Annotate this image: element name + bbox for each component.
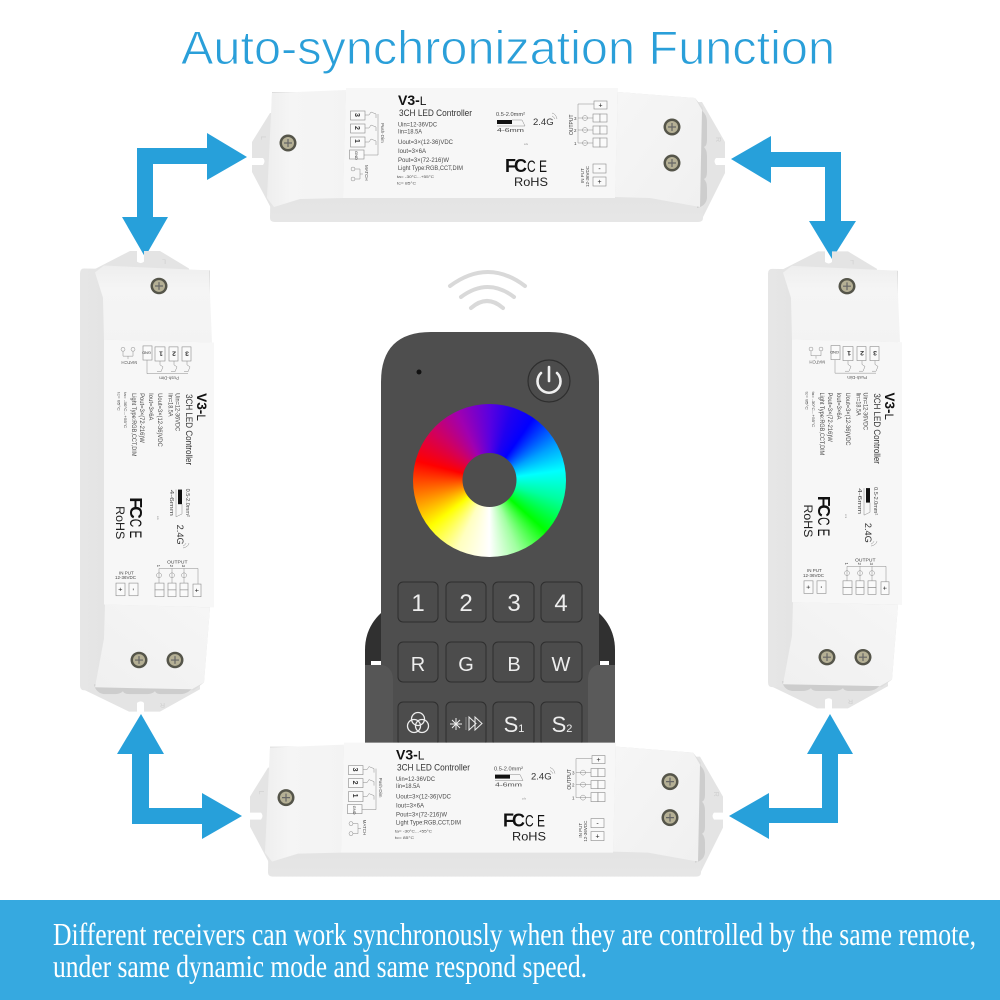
output and input terminals: 1 bbox=[156, 565, 161, 568]
terminal ridges bbox=[695, 763, 705, 863]
L and R embossed marks bbox=[848, 258, 854, 705]
push-dim wiring: 3 bbox=[185, 349, 189, 356]
certification marks: FC bbox=[505, 156, 527, 176]
screws bbox=[818, 278, 872, 665]
model and specifications: Uout=3×(12-36)VDC bbox=[844, 392, 850, 446]
model and specifications bbox=[805, 392, 897, 464]
L and R embossed marks: L bbox=[257, 791, 264, 795]
output and input terminals: + bbox=[595, 834, 600, 841]
model and specifications: Iout=3×6A bbox=[396, 804, 424, 810]
wire specification and 2.4G bbox=[156, 489, 190, 548]
output and input terminals: 2 bbox=[572, 783, 575, 788]
model and specifications: Iout=3×6A bbox=[398, 149, 426, 155]
L and R embossed marks: R bbox=[714, 137, 721, 142]
push-dim wiring: GND bbox=[142, 350, 151, 355]
model and specifications: tc= 85°C bbox=[395, 835, 414, 840]
push-dim wiring bbox=[809, 346, 879, 380]
wire specification and 2.4G: 0.5-2.0mm² bbox=[872, 487, 878, 515]
model and specifications: Iin=18.5A bbox=[396, 784, 420, 790]
wire specification and 2.4G: 2.4G bbox=[863, 523, 873, 543]
model and specifications bbox=[395, 747, 470, 840]
output and input terminals: IN PUT bbox=[807, 568, 822, 573]
output and input terminals: 2 bbox=[169, 565, 174, 568]
output and input terminals: OUTPUT bbox=[567, 769, 573, 790]
model and specifications: V3-L bbox=[396, 747, 425, 763]
terminal ridges bbox=[782, 681, 882, 691]
model and specifications: Pout=3×(72-216)W bbox=[826, 392, 832, 442]
model and specifications: Uout=3×(12-36)VDC bbox=[398, 140, 454, 146]
push-dim wiring: 3 bbox=[353, 113, 360, 117]
mounting flanges bbox=[773, 251, 888, 708]
title: Auto-synchronization Function bbox=[181, 21, 835, 74]
wire specification and 2.4G: 4-6mm bbox=[497, 128, 525, 134]
output and input terminals bbox=[567, 756, 605, 842]
end cap left bbox=[267, 90, 346, 207]
certification marks: C E bbox=[126, 519, 145, 538]
model and specifications: tc= 85°C bbox=[397, 180, 416, 185]
L and R embossed marks: R bbox=[160, 701, 165, 708]
receiver: left bbox=[80, 251, 214, 712]
model and specifications: V3-L bbox=[398, 92, 427, 108]
model and specifications: Uout=3×(12-36)VDC bbox=[396, 795, 452, 801]
push-dim wiring: 2 bbox=[860, 349, 864, 356]
button row 2: B bbox=[507, 654, 521, 676]
output and input terminals: + bbox=[804, 585, 811, 589]
footer description text: under same dynamic mode and same respond speed. bbox=[53, 948, 587, 984]
certification marks: RoHS bbox=[801, 505, 814, 538]
push-dim wiring: 1 bbox=[159, 349, 163, 356]
output and input terminals: + bbox=[596, 757, 601, 764]
certification marks bbox=[801, 496, 834, 538]
model and specifications: 3CH LED Controller bbox=[872, 393, 882, 464]
base bbox=[268, 747, 701, 877]
button row 1: 2 bbox=[459, 590, 473, 617]
base bbox=[270, 92, 703, 222]
output and input terminals: 1 bbox=[574, 141, 577, 146]
model and specifications: Pout=3×(72-216)W bbox=[138, 393, 144, 443]
arrow: top-left double-headed elbow bbox=[122, 133, 247, 257]
output and input terminals: IN PUT bbox=[119, 570, 134, 575]
output and input terminals bbox=[115, 560, 201, 597]
push-dim wiring: MATCH bbox=[364, 165, 369, 181]
push-dim wiring: 2 bbox=[353, 126, 360, 130]
certification marks bbox=[503, 811, 546, 844]
output and input terminals: + bbox=[598, 102, 603, 110]
remote body bbox=[381, 332, 599, 745]
model and specifications: ta= -30°C...+55°C bbox=[811, 392, 816, 427]
end cap left bbox=[783, 266, 900, 342]
L and R embossed marks bbox=[160, 258, 166, 708]
receiver: bottom bbox=[250, 743, 723, 877]
mounting flanges bbox=[252, 102, 725, 217]
model and specifications bbox=[397, 92, 472, 185]
output and input terminals bbox=[803, 558, 889, 594]
power button bbox=[528, 360, 570, 402]
colour wheel hub bbox=[462, 453, 516, 507]
certification marks: FC bbox=[814, 496, 834, 517]
model and specifications: Light Type:RGB,CCT,DIM bbox=[396, 821, 461, 827]
indicator dot bbox=[416, 370, 422, 374]
model and specifications: ta= -30°C...+55°C bbox=[395, 829, 432, 834]
wire specification and 2.4G: 0.5-2.0mm² bbox=[184, 489, 190, 517]
output and input terminals: 3 bbox=[869, 562, 874, 565]
button row 2: G bbox=[458, 654, 474, 676]
certification marks: FC bbox=[503, 811, 525, 831]
base bbox=[768, 269, 898, 687]
L and R embossed marks: L bbox=[162, 258, 166, 265]
push-dim wiring: Push-Dim bbox=[847, 375, 867, 380]
push-dim wiring: 3 bbox=[351, 768, 358, 772]
L and R embossed marks bbox=[257, 791, 719, 797]
certification marks: RoHS bbox=[514, 175, 548, 189]
wire specification and 2.4G: 4-6mm bbox=[856, 488, 862, 515]
push-dim wiring: 1 bbox=[847, 349, 851, 356]
push-dim wiring: MATCH bbox=[809, 360, 825, 365]
colour wheel bbox=[413, 404, 566, 557]
model and specifications: Iin=18.5A bbox=[166, 393, 173, 417]
certification marks: C E bbox=[527, 157, 547, 176]
push-dim wiring: 3 bbox=[873, 349, 877, 356]
output and input terminals: + bbox=[880, 586, 888, 590]
certification marks: C E bbox=[814, 517, 833, 536]
model and specifications: tc= 85°C bbox=[805, 392, 810, 410]
model and specifications: Iin=18.5A bbox=[398, 130, 422, 136]
arrow: bottom-left double-headed elbow bbox=[117, 714, 242, 839]
end cap right bbox=[783, 602, 898, 686]
footer band bbox=[0, 900, 1000, 1000]
output and input terminals: IN PUT bbox=[580, 168, 585, 183]
output and input terminals: OUTPUT bbox=[569, 114, 575, 135]
label plate bbox=[343, 88, 618, 198]
wire specification and 2.4G: o k bbox=[156, 516, 160, 520]
receiver: right bbox=[768, 251, 902, 708]
output and input terminals: - bbox=[596, 821, 599, 828]
button row 1 bbox=[398, 582, 582, 622]
output and input terminals: 2 bbox=[574, 128, 577, 133]
push-dim wiring: GND bbox=[830, 350, 839, 355]
model and specifications: 3CH LED Controller bbox=[397, 763, 470, 773]
button row 1: 1 bbox=[411, 590, 425, 617]
push-dim wiring: Push-Dim bbox=[378, 778, 383, 798]
screws bbox=[130, 278, 184, 668]
certification marks bbox=[113, 497, 146, 539]
L and R embossed marks: L bbox=[259, 136, 266, 140]
model and specifications: Pout=3×(72-216)W bbox=[396, 813, 447, 819]
model and specifications: tc= 85°C bbox=[117, 392, 122, 411]
icon: wireless signal bbox=[450, 272, 525, 308]
button row 2: R bbox=[411, 654, 425, 676]
L and R embossed marks: R bbox=[712, 792, 719, 797]
button row 3: S1 bbox=[504, 712, 524, 737]
button row 3 bbox=[398, 702, 582, 746]
L and R embossed marks: R bbox=[848, 698, 853, 705]
footer description text bbox=[53, 916, 976, 984]
output and input terminals: 12-36VDC bbox=[585, 165, 590, 187]
wire specification and 2.4G: 2.4G bbox=[531, 772, 552, 783]
arrow: bottom-right double-headed elbow bbox=[729, 714, 853, 839]
push-dim wiring: 1 bbox=[351, 794, 358, 798]
screws bbox=[278, 773, 678, 826]
certification marks: RoHS bbox=[512, 830, 546, 844]
model and specifications: Uin=12-36VDC bbox=[861, 392, 868, 431]
output and input terminals: IN PUT bbox=[578, 823, 583, 838]
wire specification and 2.4G: 4-6mm bbox=[495, 783, 523, 789]
output and input terminals: 12-36VDC bbox=[803, 573, 825, 578]
push-dim wiring: 2 bbox=[172, 349, 176, 356]
button row 2: W bbox=[552, 654, 571, 676]
label plate bbox=[341, 743, 616, 853]
output and input terminals: 12-36VDC bbox=[583, 820, 588, 842]
model and specifications bbox=[117, 392, 210, 465]
output and input terminals bbox=[569, 101, 607, 187]
certification marks: C E bbox=[525, 812, 545, 831]
remote holder wings behind bbox=[365, 613, 615, 745]
certification marks: FC bbox=[126, 497, 146, 519]
push-dim wiring: 1 bbox=[353, 139, 360, 143]
button row 2 bbox=[398, 642, 582, 682]
output and input terminals: OUTPUT bbox=[167, 560, 187, 566]
wire specification and 2.4G bbox=[844, 487, 878, 546]
model and specifications: Iout=3×6A bbox=[147, 393, 153, 420]
receiver: top bbox=[252, 88, 725, 222]
model and specifications: Pout=3×(72-216)W bbox=[398, 158, 449, 164]
push-dim wiring bbox=[121, 346, 191, 381]
push-dim wiring: MATCH bbox=[362, 820, 367, 835]
wire specification and 2.4G bbox=[496, 112, 557, 146]
model and specifications: V3- L bbox=[194, 393, 210, 421]
base bbox=[80, 268, 210, 690]
remote control bbox=[365, 332, 615, 746]
button row 1: 4 bbox=[554, 590, 568, 617]
model and specifications: Uout=3×(12-36)VDC bbox=[156, 393, 162, 447]
model and specifications: 3CH LED Controller bbox=[399, 108, 472, 118]
output and input terminals: 3 bbox=[181, 565, 186, 568]
output and input terminals: 3 bbox=[574, 116, 577, 121]
output and input terminals: + bbox=[192, 588, 200, 592]
certification marks: RoHS bbox=[113, 506, 127, 539]
push-dim wiring: Push-Dim bbox=[380, 123, 385, 143]
output and input terminals: OUTPUT bbox=[855, 558, 876, 563]
model and specifications: Light Type:RGB,CCT,DIM bbox=[130, 393, 136, 457]
push-dim wiring: GND bbox=[354, 151, 359, 160]
model and specifications: Light Type:RGB,CCT,DIM bbox=[398, 166, 463, 172]
button row 3: S2 bbox=[552, 712, 572, 737]
wire specification and 2.4G: 2.4G bbox=[175, 525, 185, 545]
output and input terminals: - bbox=[817, 586, 824, 588]
push-dim wiring bbox=[350, 111, 385, 181]
label plate bbox=[104, 340, 214, 607]
model and specifications: Uin=12-36VDC bbox=[173, 393, 180, 432]
wire specification and 2.4G: o k bbox=[844, 514, 848, 519]
model and specifications: Iin=18.5A bbox=[854, 392, 861, 416]
end cap right bbox=[95, 605, 210, 689]
wire specification and 2.4G: o k bbox=[522, 797, 527, 801]
end cap right bbox=[613, 747, 700, 862]
mounting flanges bbox=[250, 757, 723, 872]
label plate bbox=[792, 339, 902, 605]
end cap right bbox=[615, 92, 702, 207]
screws bbox=[280, 118, 680, 172]
output and input terminals: 12-36VDC bbox=[115, 575, 137, 580]
wire specification and 2.4G: o k bbox=[524, 142, 529, 146]
wire specification and 2.4G: 0.5-2.0mm² bbox=[494, 767, 523, 773]
push-dim wiring: 2 bbox=[351, 781, 358, 785]
arrow: top-right double-headed elbow bbox=[731, 136, 856, 259]
button row 1: 3 bbox=[507, 590, 521, 617]
terminal ridges bbox=[94, 684, 194, 694]
model and specifications: ta= -30°C...+55°C bbox=[397, 174, 434, 179]
model and specifications: Light Type:RGB,CCT,DIM bbox=[818, 392, 824, 455]
wire specification and 2.4G: 2.4G bbox=[533, 117, 554, 128]
push-dim wiring: MATCH bbox=[121, 360, 137, 365]
mounting flanges bbox=[85, 251, 200, 712]
wire specification and 2.4G: 4-6mm bbox=[168, 490, 174, 517]
output and input terminals: 3 bbox=[572, 771, 575, 776]
wire specification and 2.4G bbox=[494, 767, 555, 801]
output and input terminals: 1 bbox=[572, 796, 575, 801]
push-dim wiring bbox=[348, 766, 383, 836]
L and R embossed marks bbox=[259, 136, 721, 142]
output and input terminals: + bbox=[116, 587, 123, 591]
model and specifications: Uin=12-36VDC bbox=[398, 122, 438, 128]
model and specifications: 3CH LED Controller bbox=[184, 394, 194, 465]
L and R embossed marks: L bbox=[850, 258, 854, 265]
model and specifications: V3- L bbox=[882, 392, 897, 420]
terminal ridges bbox=[697, 108, 707, 208]
end cap left bbox=[265, 745, 344, 862]
output and input terminals: 1 bbox=[844, 562, 849, 565]
end cap left bbox=[95, 266, 212, 343]
certification marks bbox=[505, 156, 548, 189]
push-dim wiring: GND bbox=[352, 806, 357, 815]
model and specifications: Uin=12-36VDC bbox=[396, 777, 436, 783]
push-dim wiring: Push-Dim bbox=[159, 376, 179, 381]
holder clips bbox=[365, 661, 615, 745]
model and specifications: ta= -30°C...+55°C bbox=[123, 392, 128, 428]
wire specification and 2.4G: 0.5-2.0mm² bbox=[496, 112, 525, 118]
model and specifications: Iout=3×6A bbox=[835, 392, 841, 420]
output and input terminals: - bbox=[598, 166, 601, 173]
output and input terminals: 2 bbox=[857, 562, 862, 565]
output and input terminals: - bbox=[129, 588, 136, 591]
output and input terminals: + bbox=[597, 179, 602, 186]
